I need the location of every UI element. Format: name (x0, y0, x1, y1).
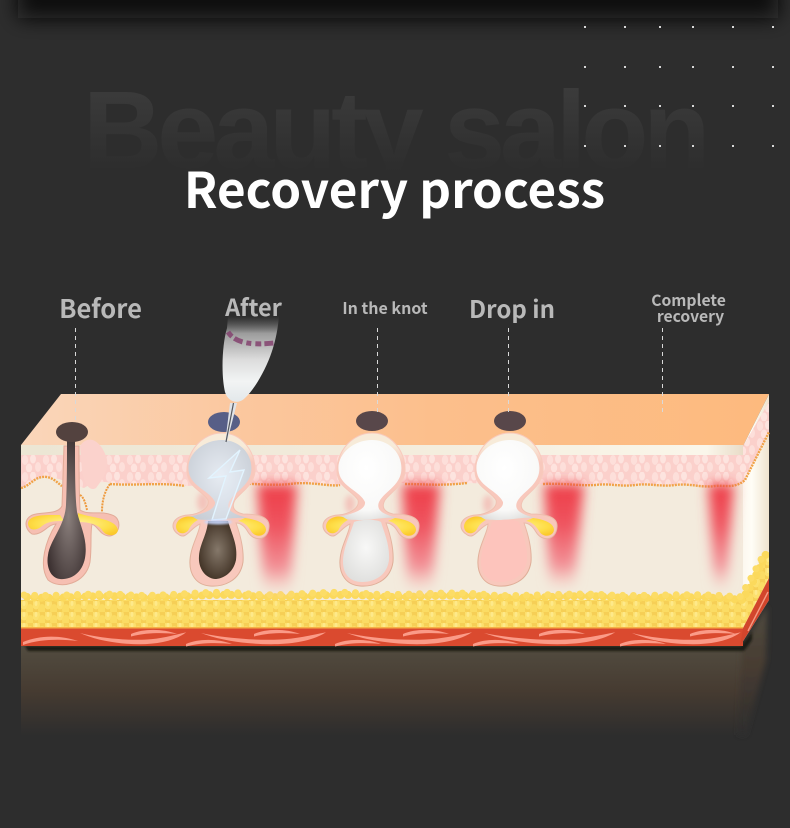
right side epidermis (743, 402, 769, 484)
top skin surface (21, 394, 769, 446)
follicle halo (26, 446, 119, 585)
glands (326, 516, 416, 536)
hair bulb (199, 521, 236, 579)
hair follicle 3: in the knot (323, 411, 419, 586)
spark (204, 520, 232, 524)
white lower bulb (343, 520, 389, 582)
needle (225, 403, 237, 444)
purple band (228, 332, 274, 344)
top shadow band (18, 0, 778, 18)
hair shaft and bulb (48, 440, 86, 579)
scab (356, 411, 388, 431)
hair follicle 1: before (26, 422, 119, 585)
lightning bolt (209, 450, 244, 520)
skin cross-section block (21, 394, 769, 651)
pink skin layer (21, 455, 743, 488)
electric needle handpiece (223, 316, 279, 444)
side bump (80, 440, 107, 489)
reflection right fade (738, 606, 767, 735)
fat layer (21, 550, 769, 628)
muscle layer (21, 578, 769, 646)
label: After: After (224, 289, 283, 323)
tinted halo (173, 433, 269, 586)
right side face (740, 394, 769, 646)
red inflammation streaks (257, 484, 734, 590)
decorative dot grid (584, 26, 774, 147)
scab (494, 411, 526, 431)
block reflection (21, 606, 767, 736)
white upper bulb (476, 440, 539, 520)
upper ice-blue bulb (188, 440, 251, 520)
background watermark: Beauty salon: Beauty salon (83, 69, 705, 192)
glands (176, 516, 266, 536)
sebaceous glands (28, 513, 118, 535)
dashed leader lines (76, 328, 662, 420)
block shadow (25, 632, 752, 651)
epidermis cream strip (21, 445, 743, 456)
pink lower bulb (481, 520, 527, 582)
hair cap (56, 422, 88, 442)
dermis layer (21, 468, 743, 602)
handpiece body (223, 316, 279, 402)
follicle halo (461, 433, 557, 586)
label: Complete recovery: recovery (657, 304, 724, 327)
title: Recovery process (184, 152, 605, 223)
orange basement membrane line (21, 432, 769, 488)
hair follicle 2: after (173, 412, 269, 586)
stage labels (59, 288, 726, 327)
glands (464, 516, 554, 536)
reflection main (21, 646, 747, 736)
label: Complete recovery: Complete (651, 288, 726, 311)
label: In the knot: In the knot (342, 295, 428, 319)
label: Before: Before (59, 289, 142, 326)
pink flush beside follicles (197, 492, 493, 513)
orange duct lines (80, 484, 110, 512)
follicle halo (323, 433, 419, 586)
hair follicle 4: drop in (461, 411, 557, 586)
label: Drop in: Drop in (469, 290, 555, 325)
white upper bulb (338, 440, 401, 520)
hair cap with blue tint (208, 412, 240, 432)
